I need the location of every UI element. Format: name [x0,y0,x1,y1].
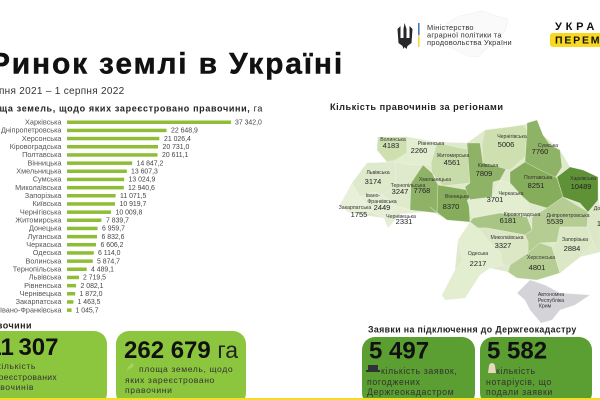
region: Kirovohrad [470,213,532,235]
map labels: 6181 [500,216,516,225]
map labels: 3247 [392,187,408,196]
map labels: Тернопільська [391,183,425,189]
bar chart: area by region: Чернігівська [20,207,62,216]
map labels: 4183 [383,141,399,150]
bar chart: area by region: 1 872,0 [80,291,103,298]
campaign logo [550,21,600,47]
bar chart: area by region: Донецька [29,224,62,233]
bar chart: area by region: Хмельницька [16,166,62,176]
bar chart: area by region: 12 940,6 [128,185,155,192]
map labels: 2449 [374,203,390,212]
bar chart: area by region: 20 611,1 [162,152,188,159]
bar chart: area by region: 6 959,7 [102,226,125,233]
bar chart: area by region: Дніпропетровська [1,126,62,135]
map labels: Чернівецька [386,214,416,220]
bar chart: area by region: Тернопільська [13,264,62,274]
bar chart: area by region [0,118,262,314]
ministry logo: Міністерство [427,23,474,32]
bar chart: area by region: 10 009,8 [116,209,142,216]
bar chart: area by region: 1 045,7 [76,307,99,314]
bar chart: area by region: Чернівецька [20,289,62,298]
card: number of deals [0,331,107,400]
card: notaries: кількість [496,366,536,376]
bar chart: area by region: 1 463,5 [78,299,101,306]
bar chart: area by region: 11 071,5 [120,193,146,200]
bar chart: area by region: Полтавська [22,150,62,159]
bar chart: area by region: 14 847,2 [136,160,163,167]
card: notaries: нотаріусів, що [486,377,552,387]
map labels: 2884 [564,244,580,253]
region: Zaporizhzhia [552,227,593,273]
bar chart: area by region: 37 342,0 [235,120,262,126]
bar chart: area by region: Житомирська [15,216,62,224]
card: land area [116,331,246,400]
region: Rivne [395,140,436,165]
bar chart: area by region: 20 731,0 [162,144,189,151]
region: Khmelnytsky [410,165,438,213]
icon: notary [488,363,496,373]
region: Ivano-Frankivsk [360,192,396,218]
map labels: Чернігівська [497,134,527,140]
bar chart: area by region: Запорізька [25,191,62,200]
map labels [339,134,600,310]
bar chart: area by region: 22 648,9 [171,128,198,135]
campaign logo: УКРА [555,21,598,33]
card: approved applications: погоджених [367,377,420,387]
map labels: Полтавська [524,175,552,181]
card: notaries: 5 582 [487,338,547,364]
map labels: 8370 [443,202,459,211]
map labels: Івано- [366,193,381,199]
map labels: Житомирська [437,153,470,159]
region: Vinnytsia [430,185,470,222]
region: Mykolaiv [478,228,528,265]
map labels: Львівська [366,170,390,176]
map labels: Франківська [367,199,397,205]
bar chart: area by region: Луганська [28,232,62,241]
bar chart: area by region: Івано-Франківська [0,305,62,314]
bar chart: area by region: 7 839,7 [106,218,129,224]
map labels: 3174 [365,177,381,186]
card: land area: яких зареєстровано [125,375,215,385]
region: Poltava [510,162,563,208]
map labels: Волинська [380,137,406,143]
region: Volyn [377,137,407,162]
map labels: Черкаська [498,191,524,197]
card: approved applications [362,337,475,400]
title: Ринок землі в Україні [0,48,344,80]
map labels: Кіровоградська [504,212,541,218]
map labels: Хмельницька [419,177,451,183]
map labels: 7809 [476,169,492,178]
bar chart: area by region: Київська [32,199,62,208]
bar chart: area by region: Черкаська [26,240,62,249]
card: approved applications: Держгеокадастром [367,387,454,397]
bar chart: area by region: Одеська [33,248,62,257]
region: Zakarpattia [340,183,372,215]
bar chart: area by region: 2 719,5 [83,275,106,282]
bar chart: area by region: 2 082,1 [80,283,104,290]
bar chart: area by region: 5 874,7 [97,258,120,265]
card: approved applications: 5 497 [369,338,429,364]
card: land area: правочини [125,385,172,395]
bar chart: area by region: Миколаївська [15,183,62,192]
bar chart: area by region: 21 026,4 [164,136,191,143]
region: Lviv [352,162,396,197]
region: Chernihiv [482,125,527,170]
map labels: Рівненська [418,141,444,147]
region: Ternopil [383,162,423,210]
region: Kyiv [465,143,507,200]
map labels: 7768 [414,186,430,195]
bar chart: area by region: 6 114,0 [98,250,121,257]
map base outline [340,120,600,300]
map labels: Сумська [538,143,558,149]
region: Zhytomyr [431,143,470,186]
region: Dnipropetrovsk [525,197,590,253]
map of Ukraine by region [340,120,600,323]
map labels: 4561 [444,158,460,167]
region: Donetsk [587,204,600,252]
region: Kherson [508,243,560,280]
campaign logo: ПЕРЕМ [555,34,600,46]
ministry logo [398,11,512,57]
card: land area: площа земель, щодо [139,364,233,374]
map labels: Херсонська [527,255,555,261]
map labels: Одеська [468,251,488,257]
map heading: Кількість правочинів за регіонами [330,102,504,112]
region: Odesa [442,222,503,300]
map labels: Запорізька [562,237,588,243]
map labels: Республіка [538,298,564,304]
map labels: 10489 [571,182,591,191]
map labels: 5539 [547,217,563,226]
region: Chernivtsi [384,206,430,228]
bar chart: area by region: Львівська [29,273,62,282]
map labels: Закарпатська [339,205,371,211]
map labels: Крим [539,304,552,310]
map labels: Київська [478,163,498,169]
bar chart: area by region: Волинська [26,256,62,265]
card: notaries: подали заявки [486,387,553,397]
bar chart: area by region: Закарпатська [16,297,62,306]
bar chart: area by region: Вінницька [27,158,62,167]
ministry logo: продовольства України [427,38,512,47]
icon: pin [127,363,134,372]
map labels: 3701 [487,195,503,204]
bar chart: area by region: Харківська [25,118,62,126]
card: land area: 262 679 га [124,337,238,364]
map labels: Автономна [538,292,564,298]
map labels: 8251 [528,181,544,190]
ministry logo: аграрної політики та [427,30,502,40]
card: approved applications: кількість заявок, [381,366,457,376]
bar chart: area by region: 10 919,7 [120,201,146,208]
bar chart: area by region: 13 024,9 [128,177,155,184]
map labels: 2260 [411,146,427,155]
region: Crimea [517,280,590,323]
bar chart: area by region: 6 606,2 [100,242,124,249]
map labels: Дніпропетровська [546,213,590,219]
bar chart: area by region: 4 489,1 [91,266,114,274]
map labels: 4801 [529,263,545,272]
card: notaries [480,337,592,400]
map labels: Миколаївська [491,235,524,241]
icon: laptop [366,365,380,372]
bar chart: area by region: Сумська [33,175,62,184]
map labels: 3327 [495,241,511,250]
bar chart: area by region: Херсонська [22,134,62,143]
map labels: 5006 [498,140,514,149]
map labels: 7760 [532,147,548,156]
map labels: 1755 [351,210,367,219]
region: Kharkiv [557,167,598,212]
map labels: 2331 [396,217,412,226]
applications section heading: Заявки на підключення до Держгеокадастру [368,324,577,334]
map labels: Вінницька [445,194,469,200]
map labels: 2217 [470,259,486,268]
map labels: Харківська [570,176,596,182]
bar chart: area by region: 13 607,3 [131,168,158,176]
bar chart: area by region: Кіровоградська [10,142,62,151]
bar chart: area by region: 6 832,6 [102,234,125,241]
bar chart: area by region: Рівненська [24,281,62,290]
region: Cherkasy [467,180,530,218]
bottom yellow stripe [0,398,600,400]
region: Sumy [525,120,562,178]
